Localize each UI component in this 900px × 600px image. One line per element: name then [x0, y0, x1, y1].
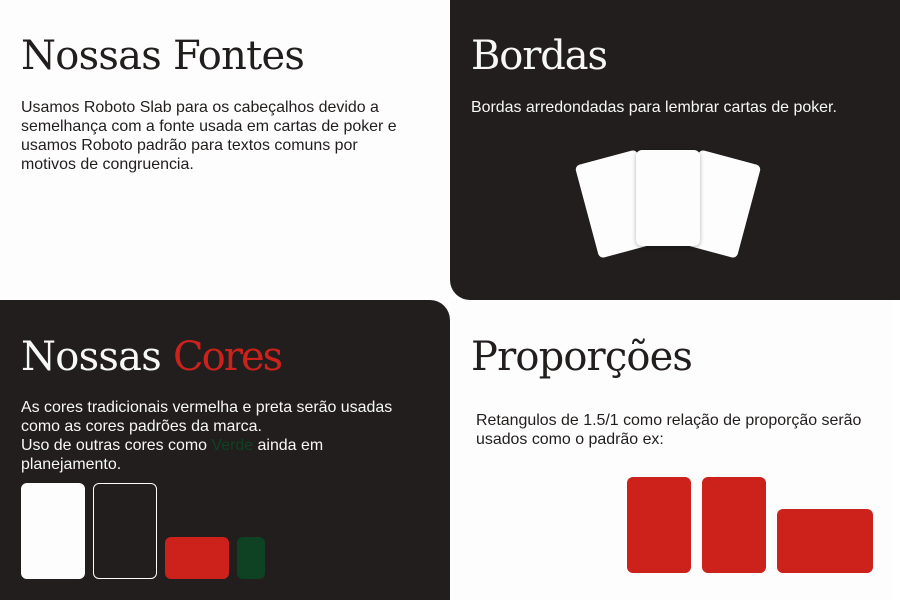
text block: colors description: planejamento. [21, 456, 121, 473]
text block: fonts description: Usamos Roboto Slab para os cabeçalhos devido a [21, 99, 379, 116]
text block: proportions description: Retangulos de 1.5/1 como relação de proporção serão [476, 412, 861, 429]
icon: fan of three cards [576, 150, 760, 258]
panel: proportions [450, 300, 892, 600]
card: center [636, 150, 700, 246]
heading: Nossas Fontes: Nossas Fontes [21, 33, 304, 79]
text block: fonts description [21, 99, 397, 173]
rectangle: portrait 2 [702, 477, 766, 573]
card: left [575, 149, 661, 259]
text block: fonts description: usamos Roboto padrão para textos comuns por [21, 137, 358, 154]
text block: colors description: Uso de outras cores como Verde ainda em [21, 437, 323, 454]
text block: colors description [21, 399, 392, 473]
text block: colors description: como as cores padrões da marca. [21, 418, 262, 435]
swatch: red [165, 537, 229, 579]
swatch: white [21, 483, 85, 579]
rectangle: portrait 1 [627, 477, 691, 573]
swatch: black with white outline [93, 483, 157, 579]
text block: colors description: As cores tradicionais vermelha e preta serão usadas [21, 399, 392, 416]
heading: Nossas Cores: Nossas Cores [21, 334, 281, 380]
panel: colors [0, 300, 450, 600]
panel: borders [450, 0, 900, 300]
text block: proportions description [476, 412, 861, 448]
rectangle: landscape [777, 509, 873, 573]
heading: Bordas: Bordas [471, 33, 607, 79]
text block: fonts description: motivos de congruencia. [21, 156, 194, 173]
card: right [674, 149, 761, 259]
text block: proportions description: usados como o padrão ex: [476, 431, 664, 448]
panel: fonts [0, 0, 450, 300]
swatch: green [237, 537, 265, 579]
text block: borders description: Bordas arredondadas para lembrar cartas de poker. [471, 99, 837, 116]
heading: Proporções: Proporções [471, 334, 692, 380]
text block: fonts description: semelhança com a fonte usada em cartas de poker e [21, 118, 397, 135]
